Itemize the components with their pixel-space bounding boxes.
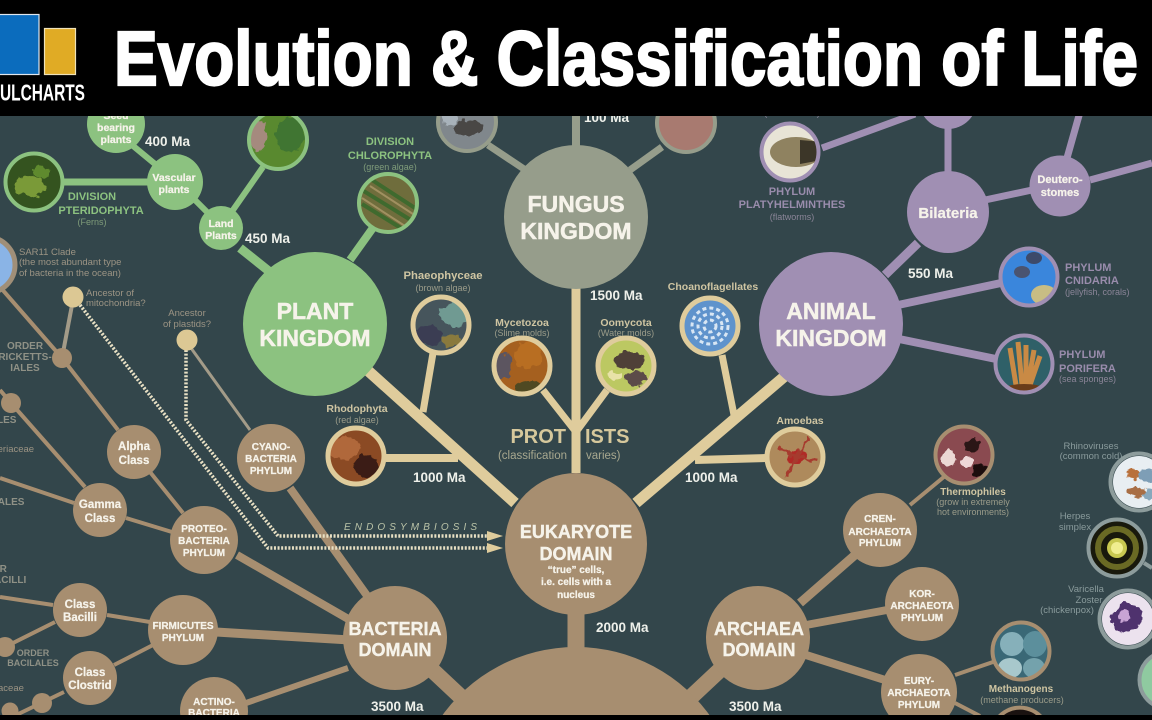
icon: green algae: CHLOROPHYTA [348, 150, 432, 162]
class bacilli node [53, 583, 107, 637]
icon: jellyfish: PHYLUM [1065, 262, 1111, 274]
deuterostomes node [1030, 156, 1090, 216]
ancestor of mitochondria: Ancestor of [86, 288, 134, 299]
age label: 3500 Ma archaea: 3500 Ma [729, 699, 782, 714]
icon: green virus [1140, 652, 1152, 708]
plant kingdom node: PLANT [277, 298, 353, 324]
panel: fungus kingdom [436, 116, 717, 300]
actinobacteria node [180, 677, 248, 720]
icon: methanogens: Methanogens [989, 684, 1054, 695]
cyanobacteria node: BACTERIA [245, 454, 297, 465]
icon: green algae [348, 136, 432, 232]
alpha class node [107, 425, 161, 479]
age label: 100 Ma: 100 Ma [584, 110, 630, 125]
icon: mycetozoa [493, 317, 550, 395]
icon: thermophiles: (grow in extremely [936, 497, 1010, 507]
icon: varicella zoster: Varicella [1068, 584, 1105, 595]
icon: flatworm: PLATYHELMINTHES [739, 199, 845, 211]
icon: oomycota: (Water molds) [598, 328, 654, 338]
euryarchaeota node: EURY- [904, 676, 934, 687]
order labels: ORDER [17, 648, 50, 658]
firmicutes node: FIRMICUTES [152, 621, 214, 632]
seed bearing plants node [87, 95, 145, 153]
root of life node [439, 647, 713, 720]
land plants node [199, 206, 243, 250]
icon: mycetozoa: Mycetozoa [495, 317, 549, 329]
icon: archaea photo cut off [998, 708, 1042, 718]
panel: viruses [1040, 441, 1152, 708]
endosymbiosis arrows: ENDOSYMBIOSIS [344, 522, 477, 533]
icon: SAR11 clade [0, 237, 121, 293]
gamma class node: Gamma [79, 499, 122, 511]
euryarchaeota node: PHYLUM [898, 700, 940, 711]
endosymbiosis arrows [80, 305, 503, 553]
icon: ferns: PTERIDOPHYTA [58, 205, 144, 217]
icon: choanoflagellates: Choanoflagellates [668, 281, 758, 293]
icon: rhinovirus: Rhinoviruses [1064, 441, 1119, 452]
crenarchaeota node [843, 493, 917, 567]
age label: 2000 Ma: 2000 Ma [596, 620, 649, 635]
bilateria node [907, 171, 989, 253]
vascular plants node [147, 154, 203, 210]
deuterostomes node: stomes [1041, 187, 1079, 199]
icon: SAR11 clade: (the most abundant type [19, 257, 121, 268]
bacteria domain node [343, 586, 447, 690]
panel: root trunk and eukaryote domain [430, 473, 722, 720]
land plants node: Plants [205, 230, 237, 242]
proteobacteria node: PROTEO- [181, 524, 227, 535]
plant kingdom node: KINGDOM [259, 325, 371, 351]
bilateria node: Bilateria [918, 205, 978, 222]
age label: 400 Ma: 400 Ma [145, 134, 191, 149]
logo: ULCHARTS [0, 80, 85, 106]
icon: jellyfish: CNIDARIA [1065, 275, 1119, 287]
bottom bar [0, 715, 1152, 720]
animal kingdom node [759, 252, 903, 396]
eukaryote domain node: EUKARYOTE [520, 522, 632, 542]
icon: thermophiles: Thermophiles [940, 487, 1006, 498]
age label: 550 Ma: 550 Ma [908, 266, 954, 281]
icon: thermophiles [935, 426, 1010, 517]
icon: sea sponge [995, 335, 1116, 393]
fungus kingdom node: KINGDOM [520, 218, 632, 244]
ancestor of mitochondria: mitochondria? [86, 298, 146, 309]
icon: varicella zoster: (chickenpox) [1040, 605, 1094, 616]
icon: SAR11 clade: of bacteria in the ocean) [19, 268, 121, 279]
proteobacteria node: BACTERIA [178, 536, 230, 547]
vascular plants node: plants [159, 184, 190, 196]
heading: protists: varies) [586, 450, 621, 462]
protostomes node [919, 71, 977, 129]
cyanobacteria node: PHYLUM [250, 466, 292, 477]
icon: phaeophyceae: Phaeophyceae [403, 270, 483, 282]
order labels: ORDER [7, 341, 44, 352]
order labels: IALES [10, 363, 40, 374]
small order nodes [0, 348, 72, 720]
archaea domain node: ARCHAEA [714, 619, 804, 639]
icon: sea sponge: (sea sponges) [1059, 374, 1116, 384]
seed bearing plants node: Seed [103, 110, 129, 122]
korarchaeota node: ARCHAEOTA [890, 601, 954, 612]
icon: phaeophyceae: (brown algae) [415, 283, 471, 293]
icon: moss [249, 111, 307, 169]
actinobacteria node: BACTERIA [188, 708, 240, 719]
bacteria domain node: BACTERIA [348, 619, 442, 639]
icon: rhodophyta: Rhodophyta [326, 403, 388, 415]
order labels [0, 341, 59, 694]
logo [0, 14, 85, 106]
eukaryote domain node: nucleus [557, 590, 595, 601]
icon: rhodophyta: (red algae) [335, 415, 379, 425]
class clostrid node [63, 651, 117, 705]
icon: phaeophyceae [403, 270, 483, 353]
header bar [0, 0, 1152, 116]
panel: bacteria domain [0, 237, 738, 720]
bacteria domain node: DOMAIN [358, 640, 432, 660]
icon: sea sponge: PHYLUM [1059, 349, 1105, 361]
icon: sea sponge: PORIFERA [1059, 363, 1116, 375]
icon: amoebas: Amoebas [776, 415, 824, 427]
icon: jellyfish: (jellyfish, corals) [1065, 287, 1130, 297]
eukaryote domain node: DOMAIN [540, 544, 612, 564]
icon: rhinovirus [1060, 441, 1152, 510]
vascular plants node: Vascular [152, 172, 196, 184]
icon: rhinovirus: (common cold) [1060, 451, 1122, 462]
archaea domain node: DOMAIN [722, 640, 796, 660]
icon: rhodophyta [326, 403, 388, 484]
heading: protists: (classification [498, 450, 567, 462]
alpha class node: Class [119, 455, 149, 467]
euryarchaeota node: ARCHAEOTA [887, 688, 951, 699]
icon: thermophiles: hot environments) [937, 507, 1009, 517]
fungus kingdom node: FUNGUS [527, 191, 625, 217]
icon: flatworm: (roundworms) [764, 108, 820, 118]
eukaryote domain node: “true” cells, [548, 565, 605, 576]
land plants node: Land [208, 218, 234, 230]
age label: 450 Ma: 450 Ma [245, 231, 291, 246]
panel: animal kingdom [739, 116, 1152, 396]
heading: protists [498, 426, 629, 462]
icon: varicella zoster [1040, 584, 1152, 648]
fungus kingdom node [504, 145, 648, 289]
eukaryote domain node: i.e. cells with a [541, 577, 611, 588]
eukaryote domain node [505, 473, 647, 615]
actinobacteria node: ACTINO- [193, 697, 235, 708]
icon: green algae: (green algae) [363, 162, 417, 172]
firmicutes node [148, 595, 218, 665]
icon: choanoflagellates [668, 281, 758, 354]
icon: flatworm: PHYLUM [769, 186, 815, 198]
icon: SAR11 clade: SAR11 Clade [19, 247, 76, 258]
icon: jellyfish [1000, 248, 1130, 306]
euryarchaeota node [881, 654, 957, 720]
age label: 1000 Ma right: 1000 Ma [685, 470, 738, 485]
crenarchaeota node: PHYLUM [859, 538, 901, 549]
class clostrid node: Class [75, 667, 105, 679]
deuterostomes node: Deutero- [1037, 174, 1083, 186]
icon: oomycota: Oomycota [600, 317, 652, 329]
archaea domain node [706, 586, 810, 690]
korarchaeota node: KOR- [909, 589, 935, 600]
animal kingdom node: ANIMAL [786, 298, 876, 324]
icon: flatworm: (flatworms) [770, 212, 814, 222]
icon: ferns [5, 153, 144, 227]
seed bearing plants node: bearing [97, 122, 135, 134]
firmicutes node: PHYLUM [162, 633, 204, 644]
class clostrid node: Clostrid [68, 680, 112, 692]
cyanobacteria node: CYANO- [252, 442, 290, 453]
icon: green algae: DIVISION [366, 136, 414, 148]
proteobacteria node: PHYLUM [183, 548, 225, 559]
icon: amoebas [767, 415, 824, 485]
icon: pink fungus [657, 94, 715, 152]
order labels: BACILALES [7, 658, 59, 668]
seed bearing plants node: plants [101, 134, 132, 146]
age label: 1500 Ma: 1500 Ma [590, 288, 643, 303]
icon: herpes simplex: simplex [1059, 522, 1091, 533]
crenarchaeota node: ARCHAEOTA [848, 527, 912, 538]
proteobacteria node [170, 506, 238, 574]
icon: methanogens [980, 622, 1064, 705]
plant kingdom node [243, 252, 387, 396]
ancestor of mitochondria [62, 286, 146, 309]
alpha class node: Alpha [118, 441, 151, 453]
icon: oomycota [598, 317, 654, 394]
gamma class node: Class [85, 513, 115, 525]
ancestor of plastids: of plastids? [163, 319, 211, 330]
animal kingdom node: KINGDOM [775, 325, 887, 351]
icon: varicella zoster: Zoster [1076, 595, 1102, 606]
panel: archaea domain [706, 426, 1064, 720]
icon: ferns: DIVISION [68, 191, 116, 203]
age label: 1000 Ma left: 1000 Ma [413, 470, 466, 485]
icon: herpes simplex: Herpes [1060, 511, 1091, 522]
heading: protists: ISTS [585, 426, 629, 448]
ancestor of plastids: Ancestor [168, 308, 206, 319]
korarchaeota node: PHYLUM [901, 613, 943, 624]
age label: 3500 Ma bacteria: 3500 Ma [371, 699, 424, 714]
class bacilli node: Class [65, 599, 95, 611]
icon: grey fungus [436, 116, 498, 153]
gamma class node [73, 483, 127, 537]
icon: ferns: (Ferns) [78, 217, 107, 227]
icon: herpes simplex [1059, 511, 1146, 576]
cyanobacteria node [237, 424, 305, 492]
ancestor of plastids [163, 308, 211, 350]
heading: protists: PROT [510, 426, 566, 448]
crenarchaeota node: CREN- [864, 514, 896, 525]
panel: plant kingdom [5, 95, 432, 396]
icon: methanogens: (methane producers) [980, 695, 1064, 705]
icon: mycetozoa: (Slime molds) [494, 328, 550, 338]
panel: protists tree [326, 270, 824, 503]
class bacilli node: Bacilli [63, 612, 97, 624]
korarchaeota node [885, 567, 959, 641]
icon: flatworm [739, 108, 845, 222]
